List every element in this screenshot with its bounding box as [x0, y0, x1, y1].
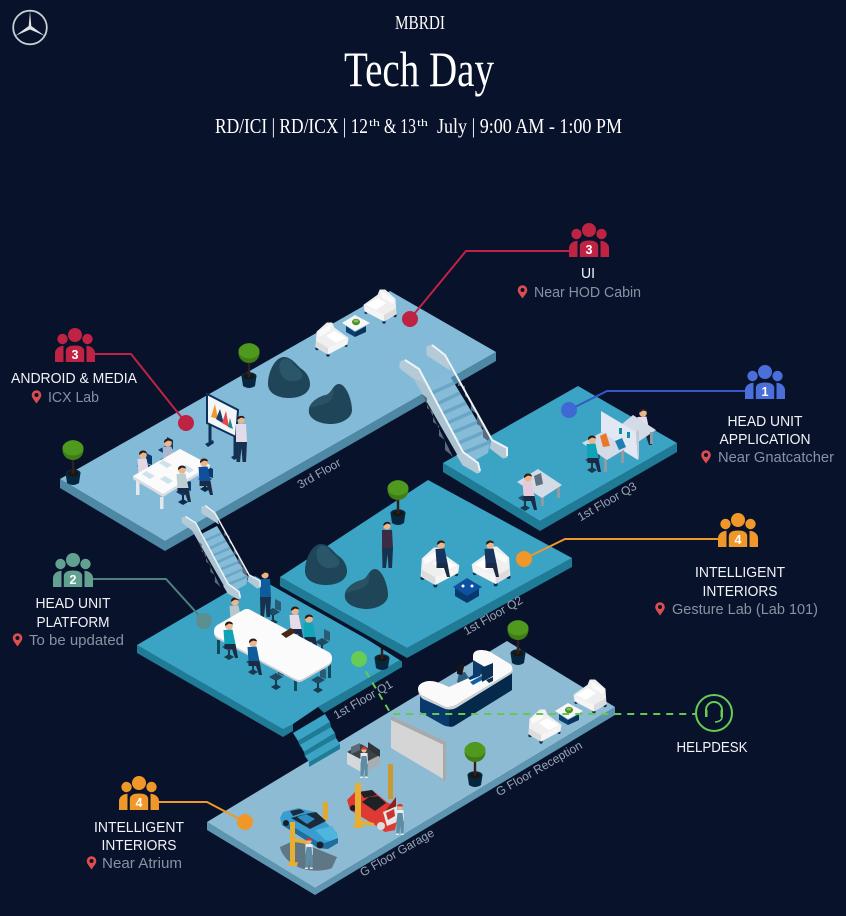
lounge: armchair	[574, 680, 607, 714]
location: Near Atrium	[102, 856, 182, 872]
subtitle: & 13	[384, 114, 416, 138]
connector	[158, 802, 245, 822]
group icon: 3	[72, 348, 79, 362]
staircase: 3rd floor to 1st floor Q1	[182, 506, 260, 599]
name: INTERIORS	[102, 838, 176, 854]
floor: ground	[207, 620, 615, 895]
plant	[62, 440, 84, 485]
subtitle	[215, 114, 622, 138]
worker at workstation	[360, 747, 368, 778]
floor: 1st floor Q2	[276, 480, 572, 661]
coffee table	[342, 315, 370, 337]
connector	[95, 354, 186, 423]
name: UI	[581, 266, 595, 282]
name: PLATFORM	[36, 615, 110, 631]
group icon: 3	[586, 243, 593, 257]
floor: 3rd floor	[60, 290, 496, 551]
conference chairs	[222, 599, 330, 693]
subtitle: July | 9:00 AM - 1:00 PM	[437, 114, 622, 138]
lounge: armchair	[528, 710, 561, 744]
subtitle: RD/ICI | RD/ICX | 12	[215, 114, 368, 138]
walking person	[382, 522, 393, 568]
marker	[237, 814, 253, 830]
group icon	[53, 553, 93, 587]
connector	[93, 579, 204, 621]
floor label: garage: G Floor Garage	[357, 825, 437, 879]
marker	[516, 551, 532, 567]
headset icon	[696, 695, 732, 731]
group icon: 4	[136, 796, 143, 810]
main title: Tech Day	[344, 41, 494, 97]
partition and desks	[582, 408, 656, 473]
meeting chairs	[137, 437, 213, 505]
floor label: 3rd floor: 3rd Floor	[295, 455, 343, 492]
group icon	[745, 365, 785, 399]
connector	[410, 251, 570, 319]
coffee table	[453, 578, 482, 603]
worker at blue car	[304, 838, 313, 869]
connector	[524, 539, 720, 559]
group icon: 2	[70, 573, 77, 587]
plant	[508, 620, 528, 665]
floor: 1st floor Q3	[443, 386, 677, 531]
bean bag	[305, 544, 347, 585]
meeting table	[133, 449, 210, 509]
group icon	[119, 776, 159, 810]
group icon: 1	[762, 385, 769, 399]
location: Near Gnatcatcher	[718, 450, 834, 466]
organisation name: MBRDI	[395, 12, 445, 34]
callout: helpdesk	[351, 651, 748, 756]
logo: three-pointed star	[13, 11, 47, 44]
floor label: Q2: 1st Floor Q2	[461, 593, 525, 638]
group icon	[55, 328, 95, 362]
subtitle: th	[417, 117, 429, 129]
seated people in front of table	[224, 621, 262, 675]
armchair with woman	[472, 540, 511, 587]
marker	[196, 613, 212, 629]
lounge: coffee table	[555, 703, 583, 725]
name: HEAD UNIT	[36, 596, 111, 612]
plant	[238, 343, 260, 388]
presenter	[236, 416, 247, 462]
plant	[372, 625, 392, 670]
location: To be updated	[29, 633, 124, 649]
floor label: Q1: 1st Floor Q1	[331, 677, 395, 722]
floor label: reception: G Floor Reception	[493, 738, 585, 799]
armchair with man	[420, 540, 459, 588]
marker	[178, 415, 194, 431]
conference table	[217, 616, 331, 691]
marker	[561, 402, 577, 418]
reception desk	[418, 650, 513, 727]
armchair	[315, 323, 348, 357]
red car with lift	[347, 764, 397, 832]
bean bag	[309, 384, 352, 424]
presentation board	[205, 394, 240, 460]
name	[36, 596, 111, 631]
plant	[388, 480, 408, 525]
receptionist	[457, 662, 470, 686]
name: INTELLIGENT	[94, 820, 184, 836]
callout: head unit application	[561, 365, 834, 466]
location: Gesture Lab (Lab 101)	[672, 602, 818, 618]
standing person	[260, 571, 271, 617]
location: ICX Lab	[48, 390, 99, 406]
connector	[569, 391, 746, 410]
name: INTELLIGENT	[695, 565, 785, 581]
group icon: 4	[735, 533, 742, 547]
bean bag	[268, 357, 310, 398]
shadow under blue car	[280, 840, 337, 871]
name	[720, 414, 810, 448]
seated people behind table	[230, 597, 318, 651]
marker	[402, 311, 418, 327]
callout: UI	[402, 223, 641, 327]
dashed connector	[359, 660, 697, 714]
bean bag	[345, 569, 388, 609]
header title block	[215, 12, 622, 138]
name: INTERIORS	[702, 584, 778, 600]
workstation	[347, 742, 380, 773]
floor: 1st floor Q1	[137, 571, 402, 737]
callout: Android and media	[11, 328, 194, 431]
plant	[464, 742, 486, 787]
armchair	[364, 290, 397, 324]
steps from 1st floor to ground	[293, 714, 340, 767]
name: HELPDESK	[676, 740, 748, 756]
desk with worker	[517, 469, 562, 511]
callout: intelligent interiors atrium	[87, 776, 253, 872]
group icon	[718, 513, 758, 547]
floor label: Q3: 1st Floor Q3	[575, 479, 639, 524]
callout: intelligent interiors gesture lab	[516, 513, 818, 618]
blue car with lift	[280, 802, 338, 866]
group icon	[569, 223, 609, 257]
subtitle: th	[369, 117, 381, 129]
name: APPLICATION	[720, 432, 810, 448]
name	[695, 565, 785, 600]
seated people in front of table	[176, 458, 213, 502]
name: ANDROID & MEDIA	[11, 371, 137, 387]
callout: head unit platform	[13, 553, 212, 649]
name	[94, 820, 184, 854]
marker	[351, 651, 367, 667]
staircase: 3rd floor to 1st floor Q3	[400, 345, 507, 473]
name: HEAD UNIT	[728, 414, 803, 430]
worker at red car	[396, 804, 404, 835]
location: Near HOD Cabin	[534, 285, 641, 301]
wall	[391, 716, 446, 782]
seated people behind table	[138, 438, 177, 487]
